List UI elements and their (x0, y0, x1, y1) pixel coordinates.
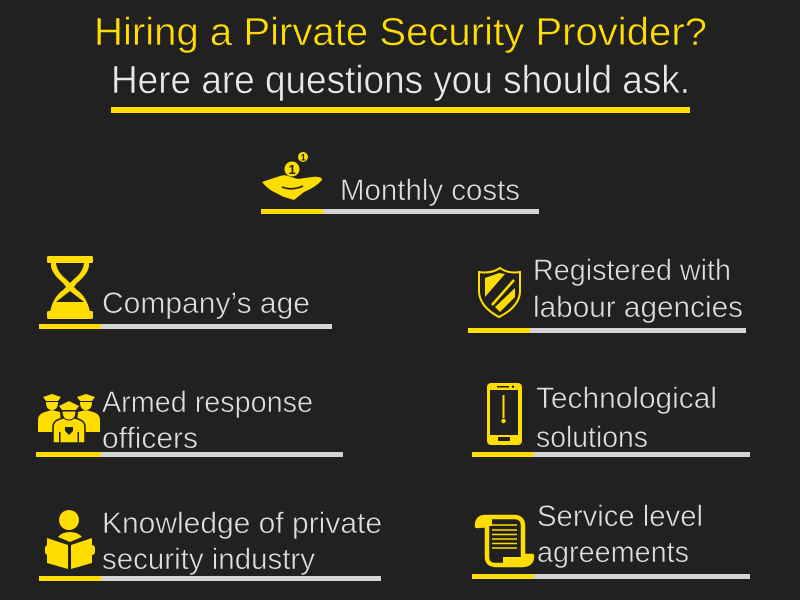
text: service level agreements: agreements (537, 536, 689, 569)
text: knowledge of private security industry (102, 507, 382, 576)
text: armed response officers: officers (102, 422, 198, 455)
icon: hourglass (47, 256, 93, 319)
progress bar (472, 452, 750, 457)
text: registered with labour agencies: Registered with (533, 254, 731, 287)
text: service level agreements (537, 500, 703, 569)
text: armed response officers: Armed response (102, 386, 313, 419)
text: technological solutions: Technological (536, 382, 717, 415)
title: Here are questions you should ask. (111, 59, 690, 102)
progress bar (36, 452, 343, 457)
progress bar (472, 574, 750, 579)
panel: technological solutions (472, 382, 750, 457)
panel: knowledge of private security industry (39, 507, 382, 581)
panel: service level agreements (472, 500, 750, 579)
text: armed response officers (102, 386, 313, 455)
text: service level agreements: Service level (537, 500, 703, 533)
icon: person reading (45, 510, 95, 569)
text: knowledge of private security industry: security industry (102, 543, 315, 576)
title (94, 11, 707, 113)
progress bar (261, 209, 539, 214)
text: registered with labour agencies (533, 254, 743, 324)
icon: smartphone with alert (487, 383, 522, 445)
panel: armed response officers (36, 386, 343, 457)
text: registered with labour agencies: labour agencies (533, 291, 743, 324)
title: Hiring a Pirvate Security Provider? (94, 11, 707, 54)
progress bar (39, 324, 332, 329)
icon: hand with coins (262, 152, 322, 200)
panel: company's age (39, 256, 332, 329)
icon: three officers (38, 394, 100, 443)
icon: scroll document (476, 516, 533, 566)
text: knowledge of private security industry: Knowledge of private (102, 507, 382, 540)
text: monthly costs: Monthly costs (340, 174, 520, 207)
progress bar (468, 328, 746, 333)
icon: hand with coins: 1 (301, 152, 306, 162)
text: company's age: Company’s age (102, 287, 310, 320)
panel: monthly costs (261, 152, 539, 214)
text: technological solutions: solutions (536, 421, 648, 454)
progress bar (39, 576, 381, 581)
icon: hand with coins: 1 (288, 162, 296, 177)
text: technological solutions (536, 382, 717, 454)
panel: registered with labour agencies (468, 254, 746, 333)
icon: shield (479, 268, 520, 317)
